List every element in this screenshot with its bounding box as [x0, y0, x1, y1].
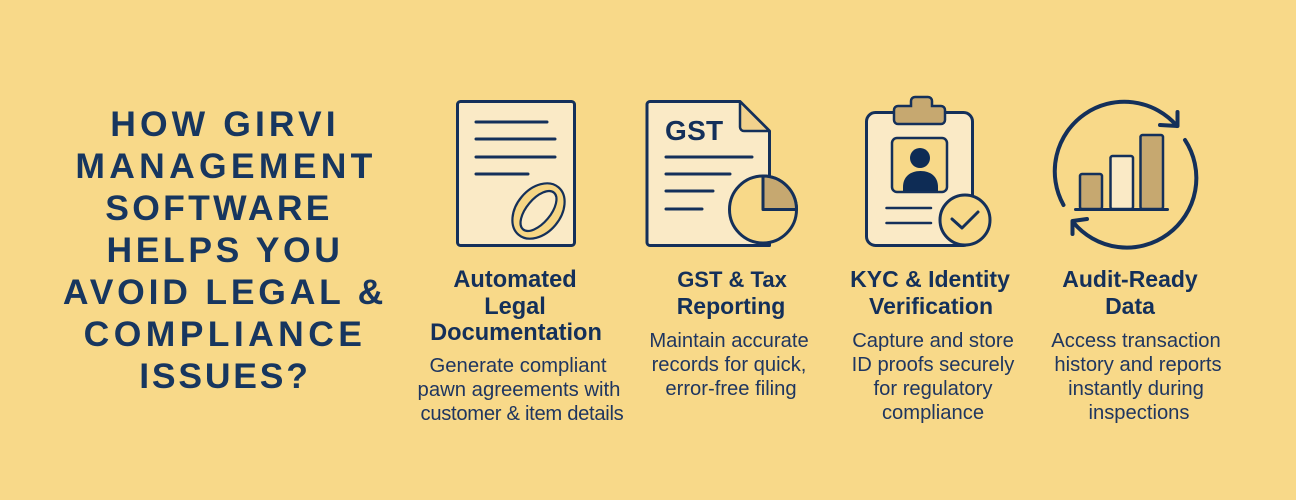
- heading: automated legal documentation: Legal: [484, 294, 546, 320]
- heading: KYC and identity verification: Verification: [869, 293, 993, 319]
- text: audit-ready description: inspections: [1088, 402, 1190, 424]
- text: GST and tax description: [649, 330, 809, 400]
- text: KYC description: Capture and store: [852, 330, 1014, 352]
- heading: audit-ready data: Data: [1105, 293, 1155, 319]
- text: KYC description: compliance: [882, 402, 984, 424]
- text: GST and tax description: error-free filing: [665, 378, 797, 400]
- text: automated legal documentation description: customer & item details: [421, 403, 623, 425]
- icon: legal document with ring: [456, 100, 576, 247]
- heading: KYC and identity verification: KYC & Identity: [850, 266, 1010, 292]
- icon: GST document with pie chart: [646, 100, 798, 247]
- icon: audit bar chart with cycle arrows: [1052, 100, 1198, 250]
- icon: GST document with pie chart: GST: [665, 115, 723, 146]
- text: audit-ready description: Access transaction: [1051, 330, 1221, 352]
- text: automated legal documentation description: Generate compliant: [430, 355, 606, 377]
- title: ISSUES?: [139, 356, 311, 396]
- column: audit-ready data: [1051, 266, 1222, 424]
- text: audit-ready description: [1051, 330, 1222, 424]
- text: KYC description: [852, 330, 1014, 424]
- text: audit-ready description: history and reports: [1054, 354, 1222, 376]
- heading: automated legal documentation: Automated: [453, 267, 577, 293]
- icon: KYC clipboard: [865, 96, 992, 247]
- heading: audit-ready data: [1062, 266, 1198, 319]
- heading: KYC and identity verification: [850, 266, 1010, 319]
- heading: GST and tax reporting: GST & Tax: [677, 267, 787, 292]
- column: automated legal documentation: [418, 267, 623, 425]
- heading: automated legal documentation: Documentation: [430, 320, 602, 346]
- title: AVOID LEGAL &: [63, 272, 387, 312]
- text: automated legal documentation description: [418, 355, 623, 425]
- text: automated legal documentation description: pawn agreements with: [418, 379, 620, 401]
- heading: GST and tax reporting: [677, 267, 787, 319]
- heading: automated legal documentation: [430, 267, 602, 346]
- title: SOFTWARE: [105, 188, 333, 228]
- title: MANAGEMENT: [75, 146, 377, 186]
- text: GST and tax description: Maintain accurate: [649, 330, 809, 352]
- title: HELPS YOU: [107, 230, 343, 270]
- text: audit-ready description: instantly during: [1068, 378, 1204, 400]
- column: GST and tax reporting: [649, 267, 809, 400]
- text: GST and tax description: records for quick,: [652, 354, 806, 376]
- text: KYC description: ID proofs securely: [852, 354, 1014, 376]
- title: HOW GIRVI: [110, 104, 340, 144]
- column: KYC and identity verification: [850, 266, 1014, 424]
- text: KYC description: for regulatory: [874, 378, 992, 400]
- heading: audit-ready data: Audit-Ready: [1062, 266, 1198, 292]
- title: COMPLIANCE: [84, 314, 366, 354]
- title: [63, 104, 387, 396]
- heading: GST and tax reporting: Reporting: [677, 293, 785, 319]
